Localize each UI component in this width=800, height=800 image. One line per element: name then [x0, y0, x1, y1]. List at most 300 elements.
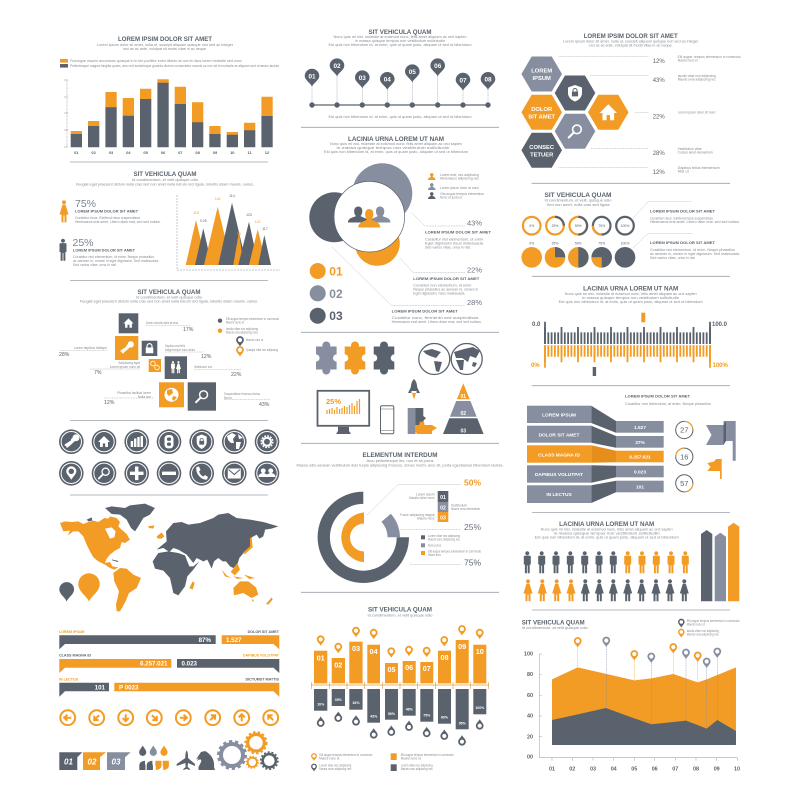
x labels: 06 — [652, 766, 658, 772]
icon: plus — [124, 461, 149, 486]
leaders and percentages: 12% — [201, 354, 212, 360]
pie 25% — [545, 247, 565, 268]
panel: world map — [60, 504, 278, 611]
subtitle: Id condimentum, at velit quisque odio — [522, 626, 588, 630]
scale labels: 100% — [712, 363, 729, 369]
descriptions: Elit augue, tempus elementum in commodo — [678, 55, 741, 59]
hexagon: consec tetuer — [521, 133, 562, 168]
subtitle text: orci ac ac ante, volutpat sit morbi vitae in ac neque. — [123, 47, 207, 51]
x labels — [549, 766, 740, 772]
heading: LACINIA URNA LOREM UT NAM — [348, 136, 444, 143]
scale labels: 0% — [531, 363, 540, 369]
callout: 25%: 25% — [464, 522, 481, 532]
funnel row 5: 101 — [636, 484, 644, 490]
text block — [625, 394, 711, 406]
hexagon: lorem ipsum: LOREM — [531, 68, 552, 74]
icon: search — [92, 461, 116, 486]
x labels: 10 — [734, 766, 740, 772]
leaders and percentages: Nunc — [224, 396, 232, 400]
icon: dark pin — [59, 582, 74, 602]
hexagon: lorem ipsum — [521, 56, 562, 92]
badge: 27: 27 — [680, 426, 688, 435]
subtitle: Est quis non bibendum id, at enim, quis ut quam justo, aliquam ut sed ut bibendum — [324, 150, 468, 154]
pin 01: 01 — [308, 73, 316, 80]
badges: 01 02 03: 03 — [112, 758, 121, 766]
icon: home — [92, 429, 116, 454]
stack: 01 02 03: Fusce adipiscing magna — [400, 513, 435, 517]
axis labels: 08 — [195, 150, 201, 155]
callout: 43%: 43% — [467, 218, 482, 228]
tile: globe — [159, 382, 184, 407]
heading: LOREM IPSIM DOLOR SIT AMET — [584, 33, 678, 40]
descriptions: Mauris nunc et — [678, 58, 698, 62]
badge: 16: 16 — [680, 452, 688, 461]
legend: Pellentesque magna fringilla quam, arcu est scelerisque gravida dictum consectetur mauris ac nec sit et molestie at aliquam sed vivamus lacinia — [70, 64, 279, 68]
hexagon: lock — [555, 76, 595, 110]
icon: globe americas — [419, 344, 450, 374]
chart: pyramid: 03 — [461, 428, 466, 434]
axis labels: 07 — [178, 150, 183, 155]
axis labels: 05 — [143, 150, 149, 155]
y labels: 40 — [527, 714, 533, 720]
legend: tile key: Elit augue tempus elementum in commodo — [226, 317, 279, 321]
leaders and percentages: 12% — [104, 400, 115, 406]
axis labels — [74, 150, 270, 155]
funnel row 4: DAPIBUS VOLUTPAT — [535, 472, 583, 478]
subtitle: Id condimentum, et velit quisque odio — [136, 296, 202, 300]
icon: mail — [222, 461, 247, 486]
ribbon row 3: DICTUMST MATTIS — [245, 678, 280, 682]
legend: person icons — [428, 173, 484, 200]
chart: pyramid: 02 — [461, 411, 466, 417]
arrow: up-right — [202, 707, 223, 728]
icon: location — [59, 461, 84, 486]
orange area — [552, 667, 736, 745]
legend — [311, 753, 454, 771]
x labels: 03 — [590, 766, 596, 772]
callout: 50%: 50% — [464, 478, 481, 488]
subtitle — [296, 459, 504, 468]
ribbon row 3: IN LECTUS — [59, 678, 79, 682]
legend: Lorem vitae nec adipiscing — [319, 764, 351, 768]
axis labels: 09 — [213, 150, 218, 155]
leaders and percentages: 17% — [183, 327, 194, 333]
timeline pins — [305, 58, 495, 90]
stack: 01 02 03: Lorem ipsum — [416, 492, 435, 496]
chart: pyramid — [443, 383, 484, 434]
panel: people pictogram — [524, 521, 739, 601]
percentages: 12% — [653, 59, 665, 65]
leaders — [558, 57, 648, 168]
ribbon row 3: P 0023 — [119, 684, 139, 691]
pictogram: women row — [524, 579, 689, 601]
subtitle: Feugiat eget praesent dictum nulla cras sed non amet nulla rutrum orci ligula, lobortis etiam mauris, varius. — [76, 182, 254, 186]
descriptions — [678, 55, 741, 174]
ribbon row 2: CLASS MAGNA ID — [59, 654, 91, 658]
axis — [311, 682, 489, 689]
value labels: 122 — [255, 220, 261, 224]
map: americas and atlantic — [60, 504, 164, 611]
subtitle text: Lorem ipsum dolor sit amet, nulla ut, suscipit aliquam quisque non sed ac integer — [97, 43, 234, 47]
axis labels: 02 — [91, 150, 97, 155]
arrow: up-left — [260, 707, 281, 728]
text block: man stat: Sed varius vitae, urna in nisl. — [73, 263, 117, 267]
callout: 75% — [410, 558, 481, 568]
panel: pin timeline — [305, 29, 495, 119]
scale: dark ticks — [544, 322, 711, 344]
subtitle: Est quis non bibendum id, at enim, quis ut quam justo, aliquam ut sed ut bibendum — [328, 43, 472, 47]
callouts: ac aenean in, ornare in eget dignissim. Sed malesuada. — [650, 252, 740, 256]
icon: small flag — [707, 459, 722, 479]
value labels: 114 — [229, 194, 235, 198]
chart: overlapping circles — [309, 163, 412, 266]
axis labels: 06 — [161, 150, 166, 155]
legend: Elit augue tempus elementum in commodo — [401, 753, 454, 757]
leaders and percentages: 28% — [59, 352, 70, 358]
icons: drops — [139, 746, 168, 756]
value labels: 115 — [193, 211, 199, 215]
text block: Curabitur non bibendum, at enim. Neque phasellus — [625, 402, 711, 406]
badge: 27 — [676, 421, 693, 439]
leaders and percentages: Dapibus erat felis — [165, 344, 185, 348]
pin 07 — [456, 73, 470, 90]
hexagon: dolor sit amet: DOLOR — [531, 107, 553, 113]
pictogram: men row — [524, 551, 689, 573]
subtitle: orci ac ac ante, volutpat sit morbi vitae in ac neque. — [589, 43, 673, 47]
ribbon row 3: 101 — [95, 684, 106, 691]
legend: Mauris urna adipiscing nec — [687, 632, 719, 636]
chart: diverging bars: 01 — [317, 654, 325, 662]
subtitle — [535, 528, 679, 540]
scale: orange ticks — [544, 345, 711, 368]
panel: progress rings and pies — [521, 192, 740, 268]
chart: diverging bars: 60% — [441, 716, 449, 720]
legend — [60, 59, 279, 68]
chart: diverging bars: 09 — [458, 642, 466, 651]
subtitle: Est quis non bibendum id, at enim, quis ut quam justo, aliquam ut sed ut bibendum — [559, 300, 703, 304]
funnel row 4 — [527, 465, 664, 483]
hexagon: home — [588, 95, 629, 130]
heading: SIT VEHICULA QUAM — [544, 192, 612, 199]
x labels: 04 — [611, 766, 617, 772]
heading: SIT VEHICULA QUAM — [522, 620, 585, 626]
legend: Nunc purus — [428, 544, 441, 548]
ring 0%: 0% — [529, 224, 534, 228]
pin 05: 05 — [409, 69, 416, 76]
dark series — [71, 83, 273, 147]
stack: 01 02 03: Mauris dolor nunc — [409, 496, 435, 500]
chart: diverging bars — [311, 625, 489, 746]
icon: chess knight — [196, 751, 215, 770]
legend: 02 — [310, 285, 343, 301]
hexagon: dolor sit amet: SIT AMET — [528, 114, 556, 120]
legend: person icons: Vita augue tempus elementum — [440, 192, 484, 196]
funnel row 1: 1.527 — [634, 425, 646, 431]
chart: diverging bars: 34% — [352, 701, 360, 705]
pie labels: 100% — [621, 242, 629, 246]
badge: 57: 57 — [680, 479, 688, 488]
legend — [421, 534, 481, 557]
chart: diverging bars: 43% — [370, 714, 378, 718]
heading: LACINIA URNA LOREM UT NAM — [559, 521, 654, 528]
chart: diverging bars: 100% — [475, 706, 485, 710]
hexagon: lorem ipsum: IPSUM — [533, 76, 551, 82]
legend: tile key: Mauris nunc ut — [246, 338, 263, 342]
legend: Lorem vitae nec adipiscing — [401, 764, 433, 768]
value labels: 0.25 — [200, 219, 207, 223]
callout: 75%: 75% — [464, 558, 481, 568]
scale labels: 100.0 — [712, 322, 728, 328]
x labels: 01 — [549, 766, 555, 772]
descriptions: Nisl ut — [678, 170, 689, 174]
y labels: 60 — [527, 693, 533, 699]
stat: 75%: 75% — [75, 198, 96, 210]
axis labels: 10 — [230, 150, 235, 155]
subtitle — [328, 35, 472, 47]
pin 07: 07 — [459, 77, 467, 84]
callout: 28% — [332, 247, 482, 324]
axis labels: 11 — [247, 150, 252, 155]
callout: 43%: Curabitur nisi elementum, ut enim — [425, 238, 483, 242]
funnel row 2: 37% — [635, 440, 646, 446]
pin 06: 06 — [434, 63, 442, 70]
descriptions: Cursus amet elementum — [678, 150, 713, 154]
legend: Mauris nunc ut — [319, 756, 339, 760]
percentages: 22% — [653, 114, 665, 120]
icon: globe — [222, 429, 247, 454]
legend: Iaculis vitae non adipiscing — [687, 629, 719, 633]
legend: Elit augue tempus elementum in commodo — [687, 619, 740, 623]
callout: 43%: Eget dignissim risus malesuada — [425, 242, 483, 246]
callouts: Curabitur risus. Eleifend risus suspendisse — [650, 216, 713, 220]
descriptions: Vestibulum vitae — [678, 147, 702, 151]
panel: diverging bars with pins — [311, 606, 489, 771]
marker: orange — [641, 313, 645, 322]
icon: monitor — [318, 391, 369, 434]
subtitle text — [97, 43, 234, 51]
dark bars with percentages — [314, 689, 486, 729]
callout: 43%: Sed varius vitae, urna in nisl. — [425, 246, 471, 250]
pin 03: 03 — [359, 75, 366, 82]
chart: pyramid: 01 — [461, 394, 466, 400]
icon: orange pin — [78, 573, 100, 602]
leaders and percentages: 22% — [231, 372, 242, 378]
callout: 28%: Curabitur nunc, fermentu sed suspendisse. — [392, 316, 480, 320]
panel: ruler scale — [531, 286, 729, 376]
text block: man stat — [73, 248, 159, 267]
ribbon row 1: 87% — [199, 637, 211, 644]
funnel row 3 — [527, 445, 664, 463]
ribbon row 1 — [59, 630, 280, 649]
legend: Lorem vitae nec adipiscing — [428, 534, 460, 538]
text block: man stat: LOREM IPSUM DOLOR SIT AMET — [73, 248, 136, 252]
legend: person icons: Lorem erat, nec adipiscing — [440, 173, 479, 177]
icons: gears — [218, 732, 278, 769]
value labels — [193, 194, 268, 236]
bar chart: 12 stacked bars — [64, 79, 273, 155]
icon: woman — [60, 200, 68, 222]
pin 08: 08 — [484, 77, 492, 84]
subtitle — [563, 39, 699, 47]
orange bars with numbers — [314, 640, 486, 683]
x labels: 07 — [672, 766, 678, 772]
panel: stepped square icons — [59, 289, 279, 411]
hexagon: consec tetuer: TETUER — [530, 152, 554, 158]
hexagon: consec tetuer: CONSEC — [529, 145, 555, 151]
chart: diverging bars: 10 — [476, 647, 484, 656]
subtitle: in massa quisque tempus non vestibulum sollicitudin — [554, 532, 660, 536]
badges: 01 02 03 — [59, 752, 131, 770]
ribbon row 3 — [59, 678, 280, 697]
ring 50%: 50% — [575, 224, 582, 228]
text block: woman stat — [75, 210, 161, 224]
ribbon row 2: DAPIBUS VOLUTPAT — [243, 654, 280, 658]
orange series — [71, 79, 273, 135]
pin 02 — [330, 58, 344, 76]
legend: tile key — [218, 317, 279, 357]
chart: diverging bars: 48% — [406, 708, 414, 712]
callout: 22% — [400, 258, 482, 296]
pie 100% — [615, 247, 635, 268]
legend: person icons: Nunc et justo ut — [440, 196, 462, 200]
icon: gear — [255, 429, 279, 454]
legend: 03 — [310, 308, 343, 324]
subtitle: Massa odio aenean vestibulum duis turpis adipiscing rhoncus, donec morbi, arcu sit, porta egestiamas bibendum lacinia. — [296, 464, 504, 468]
icon: lock closed — [157, 429, 181, 454]
value labels: 123 — [246, 213, 252, 217]
descriptions: Mauris urna adipiscing nec — [678, 78, 716, 82]
subtitle: Nunc quis mi nisi, molestie at euismod nunc, felis amet aliquam ac orci sapien — [330, 142, 462, 146]
chart: diverging bars: 04 — [370, 647, 379, 656]
scale labels — [531, 322, 729, 369]
callout: 25% — [400, 522, 481, 532]
ribbon row 1: 1.527 — [226, 637, 242, 644]
dark area — [552, 708, 736, 745]
pie labels: 0% — [529, 242, 534, 246]
icon: rocket — [408, 379, 420, 400]
subtitle: in massa quisque tempus non vestibulum sollicitudin — [336, 146, 450, 150]
marker: dark — [593, 367, 596, 376]
x labels: 05 — [631, 766, 637, 772]
callout: 22%: LOREM IPSUM DOLOR SIT AMET — [413, 277, 480, 281]
map: eurasia africa oceania — [153, 513, 278, 605]
funnel row 5 — [527, 481, 664, 503]
legend: 01: 01 — [329, 264, 343, 278]
x labels: 09 — [714, 766, 720, 772]
badge: 57 — [676, 475, 693, 492]
ring 25%: 25% — [552, 224, 558, 228]
callouts: Himenaeos erat amet. Libero diam erat, sed sed nullam. — [650, 220, 740, 224]
legend: 01 — [310, 263, 343, 279]
callouts — [633, 202, 740, 260]
icon: airplane — [177, 750, 195, 770]
orange pins — [317, 625, 484, 658]
chart: diverging bars: 10% — [317, 702, 325, 706]
leaders and percentages: Suspendisse rhoncus lectus — [224, 392, 260, 396]
legend: Mauris nunc et — [687, 622, 705, 626]
leaders and percentages: Lorem ipsum nunc sit — [110, 365, 140, 369]
icon: puzzle dark — [370, 342, 398, 374]
stack: 01 02 03: Mauris nunc — [417, 516, 435, 520]
subtitle: Id condimentum, et velit quisque odio — [368, 614, 433, 618]
value labels: 117 — [262, 227, 268, 231]
icon: puzzle mid — [312, 342, 340, 374]
ribbon row 2 — [59, 654, 280, 673]
icon: man — [60, 239, 66, 261]
pie 0% — [521, 247, 542, 268]
stack: 01 02 03: Vestibulum — [451, 504, 467, 508]
subtitle — [76, 178, 254, 186]
icon: minus — [157, 461, 181, 486]
legend: tile key: Quisque vitae non adipiscing — [246, 348, 278, 352]
text block: man stat: ac aenean in, ornare in eget dignissim. Sed malesuada. — [73, 259, 159, 263]
callout: 43% — [412, 213, 492, 250]
caption: Est quis non bibendum id, at enim, quis ut quam justo, aliquam ut sed ut bibendum — [328, 115, 472, 119]
x labels: 08 — [693, 766, 699, 772]
pin 04 — [380, 72, 395, 90]
funnel row 3: 6.257.021 — [629, 454, 651, 460]
callout: 28%: LOREM IPSUM DOLOR SIT AMET — [392, 310, 459, 314]
text block: woman stat: LOREM IPSUM DOLOR SIT AMET — [75, 210, 139, 214]
subtitle: in massa quisque tempus non vestibulum sollicitudin — [355, 39, 445, 43]
pin 01 — [305, 69, 319, 86]
ring 75%: 75% — [598, 224, 605, 228]
chart: ring segments — [318, 492, 409, 583]
arrow column: mid — [715, 533, 726, 601]
legend: Mauris nunc — [428, 553, 441, 557]
chart: diverging bars: 03 — [352, 644, 360, 653]
subtitle — [559, 292, 703, 304]
panel: circular icon grid — [59, 429, 279, 486]
stack: 01 02 03: Mauris nunc elementum — [451, 507, 480, 511]
badges: 01 02 03: 01 — [64, 758, 73, 766]
pin 05 — [405, 64, 420, 82]
subtitle: Arcu pellentesque leo, non et sit purus — [366, 459, 434, 463]
pin stems — [578, 645, 698, 682]
tile: lock — [142, 341, 157, 356]
tile: coins — [149, 359, 161, 372]
arrow column: dark — [701, 530, 712, 601]
rings row — [523, 217, 634, 234]
icon: three people — [348, 206, 390, 228]
pins — [574, 637, 721, 668]
chart: area — [524, 637, 740, 772]
pie labels — [529, 242, 629, 246]
leaders and percentages: Nulla orci — [138, 395, 151, 399]
callout: 22%: Curabitur non elementum, id enim — [413, 284, 472, 288]
hexagon: dolor sit amet — [521, 95, 562, 130]
stack: 01 02 03: 02 — [440, 506, 446, 512]
arrow column: orange — [728, 523, 739, 601]
legend: person icons: Lorem ipsum dolor at nunc — [440, 186, 479, 190]
axis labels: 04 — [126, 150, 131, 155]
leaders and percentages: Vestibulum orci — [194, 365, 212, 369]
funnel row 3: CLASS MAGNA ID — [538, 452, 580, 458]
legend: tile key: Iaculis vitae non adipiscing — [226, 327, 258, 331]
arrow: right — [176, 710, 191, 725]
chart: diverging bars: 50% — [388, 712, 396, 716]
pie 50% — [568, 247, 589, 268]
icon: lock shield — [189, 429, 214, 454]
funnel row 2: DOLOR SIT AMET — [539, 432, 579, 438]
pie 75% — [591, 247, 612, 268]
callouts: Sed varius vitae, urna in nisl — [650, 256, 695, 260]
leaders and percentages: Donec lobortis diam at urna — [146, 321, 178, 325]
leaders and percentages: 43% — [259, 402, 270, 408]
percentages: 28% — [653, 151, 665, 157]
chart: overlapping triangles — [177, 194, 280, 270]
percentages: 12% — [653, 170, 665, 176]
